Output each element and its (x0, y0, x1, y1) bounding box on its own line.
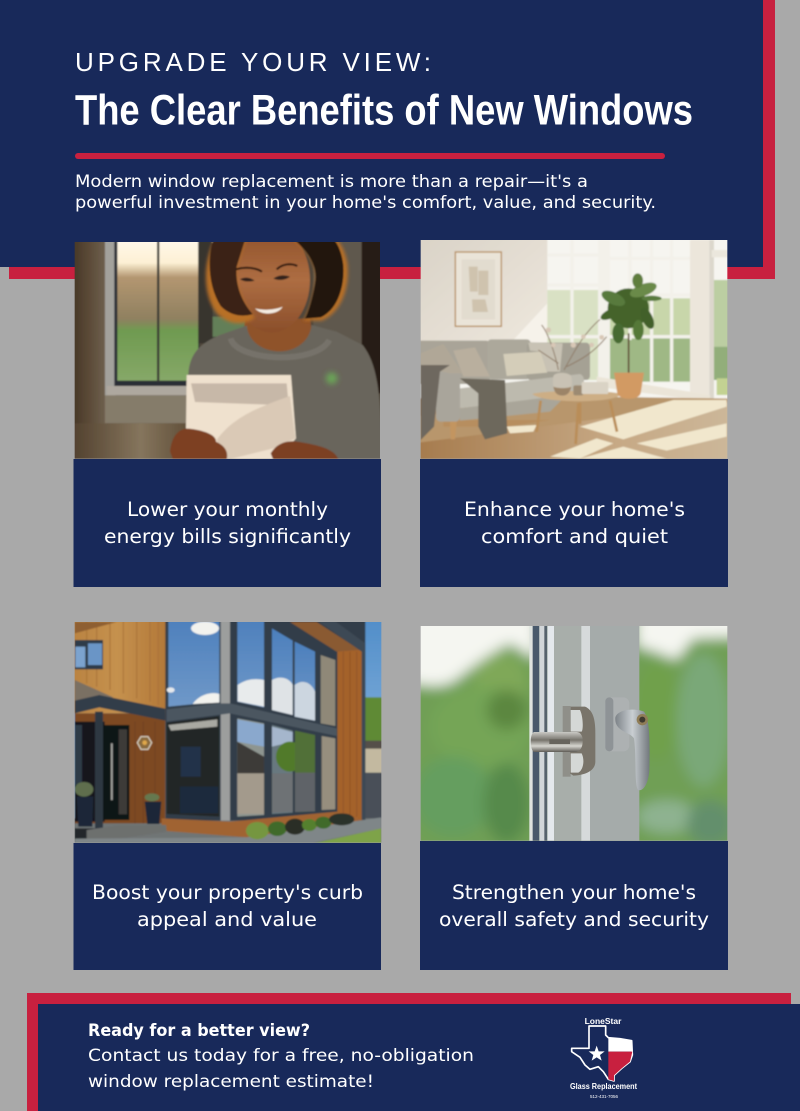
caption text: Strengthen your home's (452, 881, 696, 904)
caption text (92, 881, 363, 931)
eyebrow heading: UPGRADE YOUR VIEW: (75, 47, 431, 77)
intro paragraph: powerful investment in your home's comfort, value, and security. (75, 193, 656, 213)
card: comfort and quiet (413, 233, 747, 587)
intro paragraph (75, 172, 656, 213)
footer red offset frame (27, 993, 791, 1111)
card: lower energy bills (67, 227, 387, 587)
footer panel (27, 993, 800, 1111)
caption text: energy bills significantly (104, 525, 351, 548)
photo: modern house with wood cladding and big windows (74, 622, 382, 843)
caption panel (74, 843, 381, 970)
caption text (439, 881, 709, 931)
caption text (464, 498, 685, 548)
icon: Texas flag map (572, 1026, 632, 1081)
call to action text: window replacement estimate! (88, 1072, 374, 1092)
card: curb appeal (67, 613, 393, 970)
photo: bright living room with large windows (420, 240, 728, 459)
logo: LoneStar Glass Replacement (570, 1016, 637, 1099)
card: safety and security (420, 626, 728, 970)
logo: LoneStar Glass Replacement: 512-431-7056 (590, 1094, 619, 1099)
call to action text: Contact us today for a free, no-obligation (88, 1046, 474, 1066)
call to action text (88, 1021, 474, 1092)
caption text: Enhance your home's (464, 498, 685, 521)
caption text: comfort and quiet (481, 525, 668, 548)
caption text: appeal and value (137, 908, 317, 931)
red title rule (75, 153, 665, 159)
photo: woman reading energy bill by a window (74, 242, 380, 459)
caption panel (74, 459, 381, 587)
caption text: overall safety and security (439, 908, 709, 931)
caption text (104, 498, 351, 548)
photo: window lock and handle close-up (420, 626, 728, 841)
caption text: Lower your monthly (127, 498, 328, 521)
caption panel (420, 459, 728, 587)
caption text: Boost your property's curb (92, 881, 363, 904)
main title: The Clear Benefits of New Windows (75, 86, 693, 134)
intro paragraph: Modern window replacement is more than a repair—it's a (75, 172, 588, 192)
caption panel (420, 841, 728, 970)
header red offset frame (9, 0, 775, 279)
logo: LoneStar Glass Replacement: LoneStar (585, 1016, 622, 1026)
logo: LoneStar Glass Replacement: Glass Replacement (570, 1082, 637, 1091)
header panel (0, 0, 775, 279)
call to action text: Ready for a better view? (88, 1021, 310, 1041)
